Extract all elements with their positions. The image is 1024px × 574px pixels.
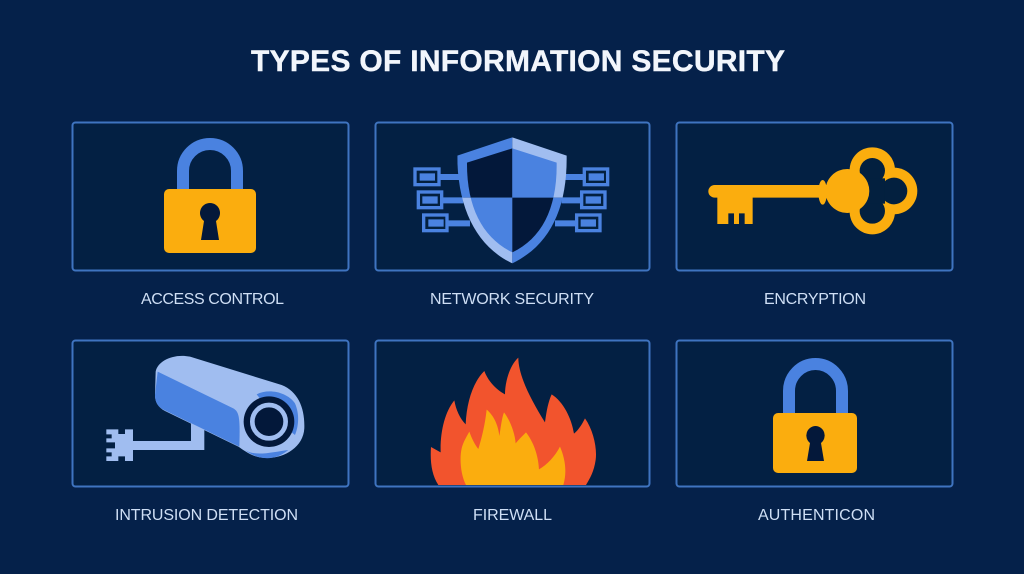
shield [453,135,569,264]
access control label: ACCESS CONTROL [141,291,284,308]
panel: encryption [676,122,952,308]
authentication label: AUTHENTICON [758,507,875,524]
icon: padlock [773,364,857,473]
firewall frame [376,340,650,486]
panel: authentication [676,340,952,524]
panel: intrusion detection [72,340,348,524]
network security label: NETWORK SECURITY [430,291,594,308]
title: TYPES OF INFORMATION SECURITY [251,45,785,78]
icon: security camera [106,356,304,461]
panel: firewall [376,340,650,524]
icon: padlock [164,144,256,253]
authentication frame [676,340,952,486]
intrusion detection label: INTRUSION DETECTION [115,507,298,524]
intrusion detection frame [72,340,348,486]
panel: access control [72,122,348,308]
camera mount [106,418,204,461]
access control frame [72,122,348,270]
encryption frame [676,122,952,270]
network nodes [415,169,608,231]
camera lens [244,396,294,447]
camera body [155,356,304,458]
panel: network security [376,122,650,308]
icon: key [708,147,917,234]
encryption label: ENCRYPTION [764,291,866,308]
icon: shield with network nodes [415,135,608,264]
icon: flame [431,358,596,485]
firewall label: FIREWALL [473,507,552,524]
network security frame [376,122,650,270]
